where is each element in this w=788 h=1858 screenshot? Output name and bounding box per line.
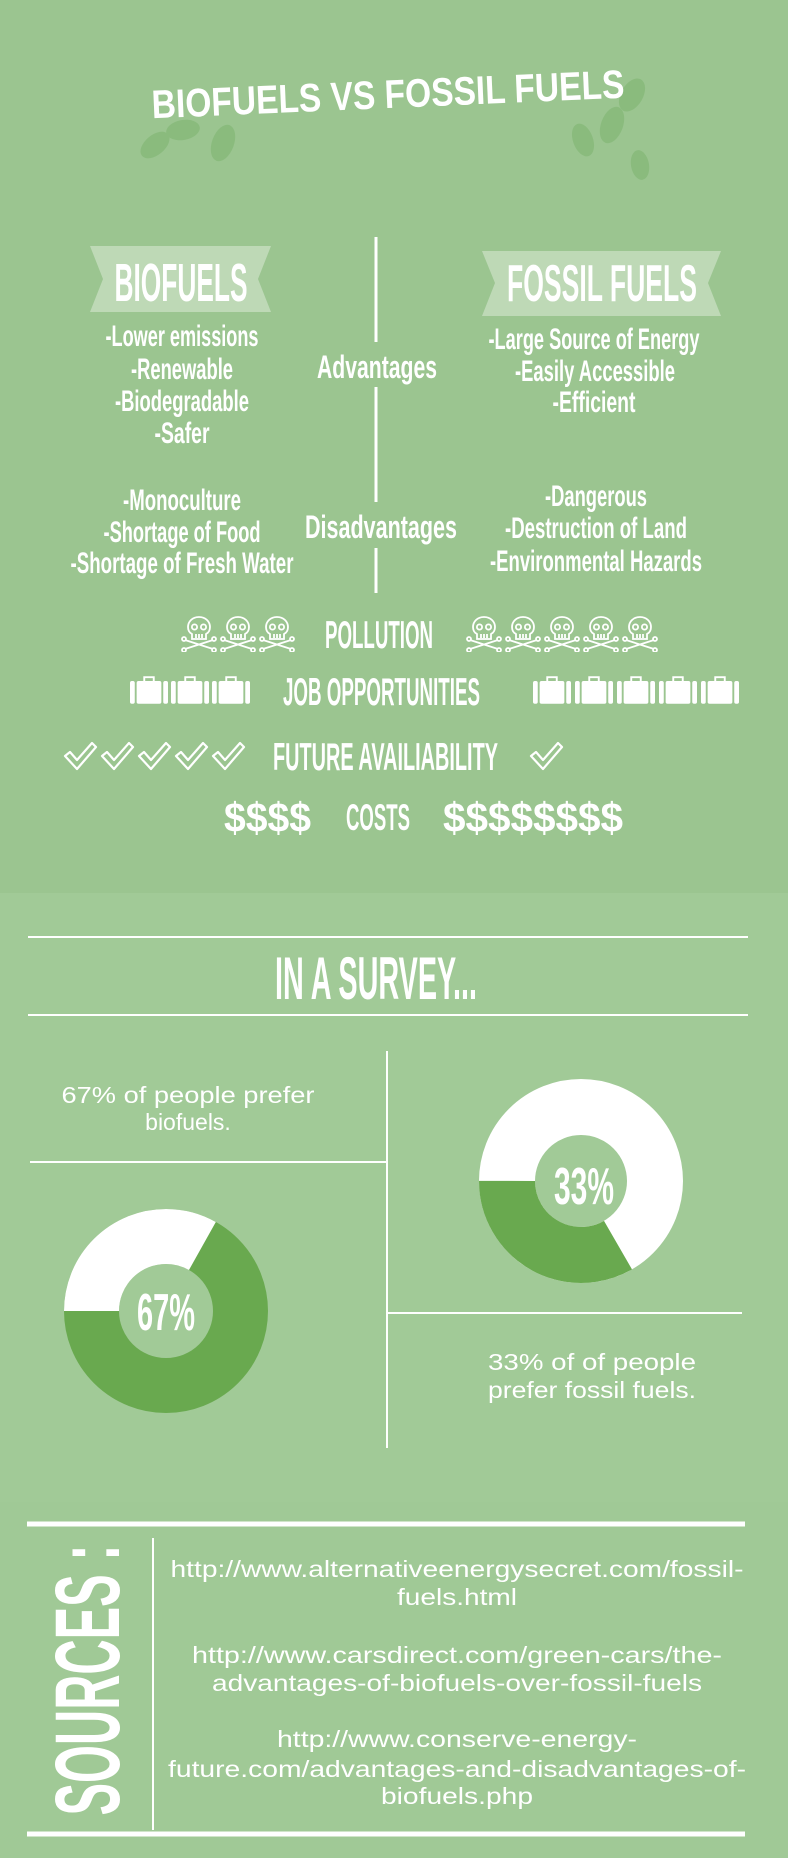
fossil advantages: -Efficient (552, 386, 636, 419)
fossil disadvantages (490, 480, 702, 578)
source links: future.com/advantages-and-disadvantages-of- (168, 1756, 746, 1782)
fossil disadvantages: -Dangerous (545, 480, 647, 513)
divider vertical (374, 237, 378, 593)
text: 33% prefer fossil (488, 1349, 696, 1403)
fossil advantages (488, 323, 700, 419)
pollution row: POLLUTION (325, 614, 433, 657)
leaves decoration (136, 74, 651, 181)
banner: biofuels (90, 246, 271, 313)
costs row (224, 794, 623, 841)
text: 33% prefer fossil: 33% of of people (488, 1349, 696, 1375)
biofuels advantages (106, 320, 258, 450)
banner: fossil fuels (482, 251, 721, 316)
biofuels disadvantages: -Shortage of Fresh Water (70, 547, 294, 580)
donut 67%: 67% (137, 1284, 195, 1342)
banner: biofuels: BIOFUELS (114, 253, 248, 313)
source links: fuels.html (397, 1584, 517, 1610)
title: BIOFUELS VS FOSSIL FUELS (151, 63, 625, 127)
text: 33% prefer fossil: prefer fossil fuels. (488, 1377, 696, 1403)
sources frame (27, 1524, 745, 1834)
survey grid lines (30, 1051, 742, 1448)
biofuels advantages: -Lower emissions (106, 320, 258, 353)
biofuels advantages: -Safer (154, 417, 210, 450)
source links (168, 1556, 746, 1809)
biofuels disadvantages (70, 484, 294, 580)
survey heading: IN A SURVEY... (275, 945, 477, 1012)
label advantages: Advantages (317, 349, 437, 385)
sources heading: SOURCES : (37, 1544, 139, 1816)
donut 67% (92, 1236, 240, 1386)
source links: advantages-of-biofuels-over-fossil-fuels (212, 1670, 702, 1696)
future availability row: FUTURE AVAILIABILITY (273, 736, 498, 779)
future availability row (65, 736, 562, 779)
biofuels advantages: -Renewable (131, 353, 233, 386)
biofuels disadvantages: -Monoculture (123, 484, 241, 517)
background top (0, 0, 788, 893)
fossil advantages: -Easily Accessible (515, 355, 675, 388)
text: 67% prefer biofuels: biofuels. (145, 1109, 231, 1135)
donut 33%: 33% (554, 1158, 614, 1216)
costs row: $$$$$$$$ (443, 794, 623, 841)
source links: biofuels.php (381, 1783, 533, 1809)
job opportunities row (130, 671, 739, 714)
costs row: COSTS (346, 797, 410, 838)
text: 67% prefer biofuels: 67% of people prefer (62, 1082, 315, 1108)
costs row: $$$$ (224, 794, 311, 841)
pollution row (182, 614, 657, 657)
background sources (0, 1502, 788, 1858)
source links: http://www.alternativeenergysecret.com/fossil- (170, 1556, 744, 1582)
biofuels advantages: -Biodegradable (115, 385, 249, 418)
source links: http://www.carsdirect.com/green-cars/the- (192, 1642, 722, 1668)
source links: http://www.conserve-energy- (277, 1726, 637, 1752)
donut 33% (480, 1080, 682, 1282)
background survey (0, 893, 788, 1502)
text: 67% prefer biofuels (62, 1082, 315, 1135)
biofuels disadvantages: -Shortage of Food (104, 516, 260, 549)
job opportunities row: JOB OPPORTUNITIES (283, 671, 480, 714)
label disadvantages: Disadvantages (305, 509, 457, 545)
